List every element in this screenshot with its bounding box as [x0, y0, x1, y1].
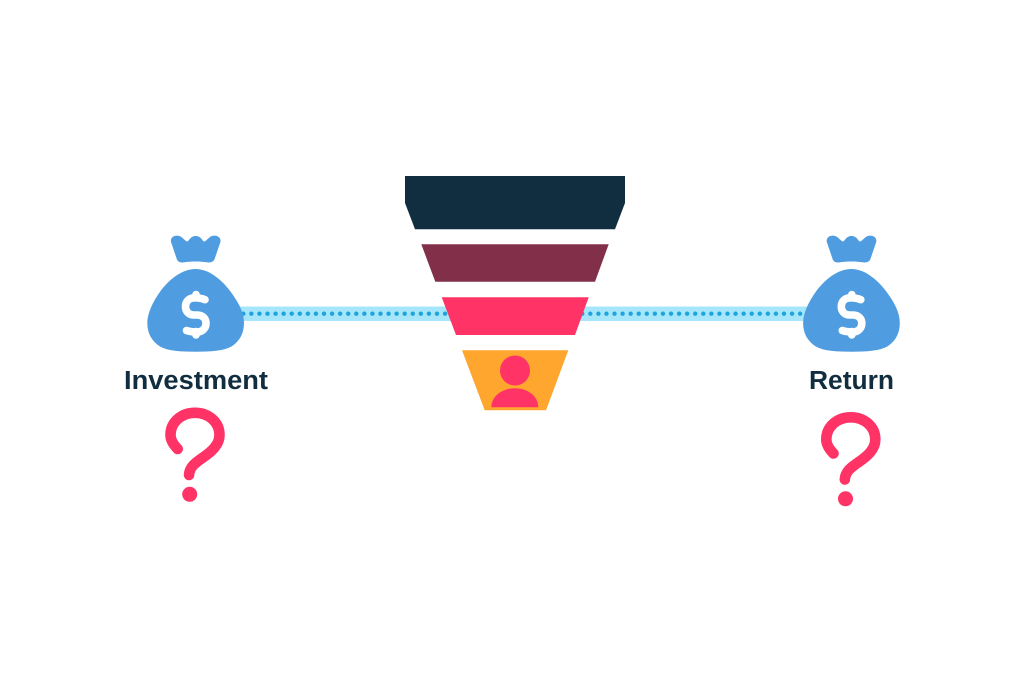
connecting line between investment and return [238, 306, 808, 321]
icon: investment question mark [170, 413, 220, 502]
investment label: Investment [124, 367, 269, 395]
funnel [405, 176, 625, 410]
icon: return money bag [803, 236, 900, 352]
icon: person [491, 356, 538, 407]
funnel layer 3: pink [442, 297, 589, 335]
funnel layer 1: navy [405, 176, 625, 229]
funnel layer 4: orange [462, 350, 568, 410]
icon: investment money bag [147, 236, 244, 352]
icon: return question mark [826, 417, 875, 506]
funnel layer 2: maroon [421, 244, 609, 282]
return label: Return [809, 367, 894, 395]
